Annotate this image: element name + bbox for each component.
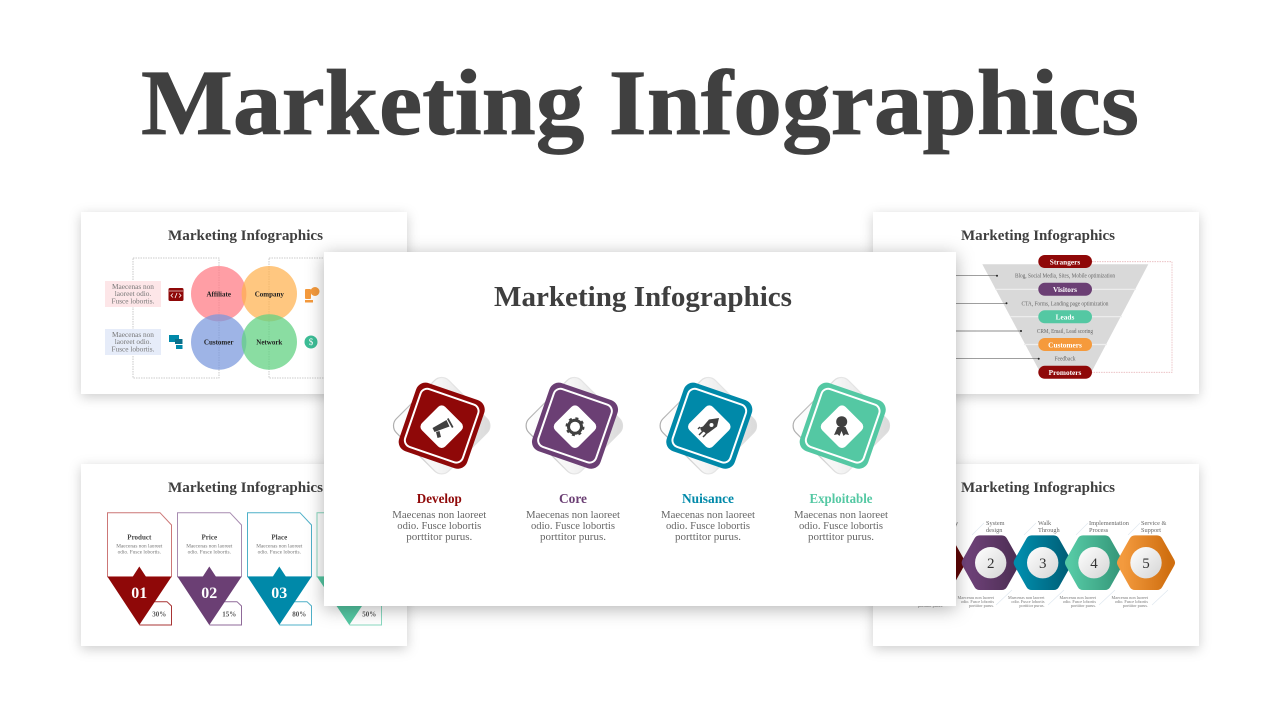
panel: pentagon pointer slide	[81, 464, 407, 646]
process descriptions: porttitor purus.	[1123, 603, 1148, 608]
step 01 product: Maecenas non laoreet	[116, 544, 163, 550]
body Core: Maecenas non laoreet	[526, 509, 620, 521]
body Exploitable: odio. Fusce lobortis	[799, 520, 883, 532]
funnel descriptions: CTA, Forms, Landing page optimization	[1022, 301, 1109, 307]
funnel descriptions: CRM, Email, Lead scoring	[1037, 329, 1093, 335]
venn circles: Affiliate	[206, 290, 231, 298]
pill: Customers: Customers	[1048, 340, 1082, 349]
pointer slide heading: Marketing Infographics	[168, 480, 323, 496]
hexagon 3	[1020, 541, 1066, 584]
pill: Strangers	[1038, 255, 1092, 268]
process labels: Process	[1089, 527, 1109, 534]
body Core: porttitor purus.	[540, 531, 606, 543]
venn circles: Customer	[204, 338, 233, 346]
funnel descriptions: Blog, Social Media, Sites, Mobile optimization	[1015, 274, 1115, 280]
text box: pink: laoreet odio.	[115, 289, 151, 298]
hexagon 5	[1123, 541, 1169, 584]
text box: blue: laoreet odio.	[115, 337, 151, 346]
label Develop: Develop	[417, 492, 462, 507]
hexagon 1	[913, 541, 959, 584]
icon tile: rocket	[656, 373, 761, 478]
funnel shape	[982, 264, 1148, 372]
icon tile: medal	[789, 373, 894, 478]
panel: hexagon process slide	[873, 464, 1199, 646]
process labels: Through	[1038, 527, 1061, 534]
process descriptions: odio. Fusce lobortis	[1011, 599, 1045, 604]
process labels: Service &	[1141, 520, 1166, 527]
process descriptions: porttitor purus.	[969, 603, 994, 608]
pill: Visitors	[1038, 283, 1092, 296]
pill: Strangers: Strangers	[1050, 257, 1080, 266]
body Nuisance: Maecenas non laoreet	[661, 509, 755, 521]
process labels: System	[986, 520, 1005, 527]
step 01 product: odio. Fusce lobortis.	[118, 550, 161, 556]
process labels	[955, 520, 1166, 534]
funnel slide heading: Marketing Infographics	[961, 228, 1115, 244]
item: Develop	[389, 373, 494, 543]
label Nuisance: Nuisance	[682, 492, 734, 507]
process descriptions: odio. Fusce lobortis	[1063, 599, 1096, 604]
icon: web layout	[169, 335, 182, 349]
process descriptions	[918, 595, 1149, 608]
text box: blue	[105, 329, 161, 355]
pill: Visitors: Visitors	[1053, 285, 1077, 294]
leader lines	[955, 275, 1040, 360]
hexagon 4	[1071, 541, 1117, 584]
process labels: Implementation	[1089, 520, 1130, 527]
venn circles	[191, 266, 297, 370]
step 04 partly hidden	[317, 513, 382, 625]
title: Marketing Infographics	[141, 52, 1139, 155]
body Exploitable	[794, 509, 888, 543]
step 01 product	[108, 513, 172, 625]
process descriptions: Maecenas non laoreet	[1059, 595, 1097, 600]
icon: phone and coin	[305, 287, 320, 302]
venn circles: Network	[256, 338, 282, 346]
process labels: Support	[1141, 527, 1161, 534]
hexagon 2: 2	[987, 556, 994, 572]
process descriptions: Maecenas non laoreet	[1111, 595, 1149, 600]
body Nuisance	[661, 509, 755, 543]
diagonal connectors	[972, 523, 1168, 605]
label Exploitable: Exploitable	[810, 492, 872, 507]
step 04 partly hidden: 50%	[362, 611, 376, 619]
pill: Customers	[1038, 338, 1092, 351]
venn slide heading: Marketing Infographics	[168, 228, 323, 244]
hexagon 4: 4	[1090, 556, 1098, 572]
text box: blue: Fusce lobortis.	[112, 344, 155, 354]
icon: code window	[168, 288, 184, 301]
step 01 product: Product	[127, 534, 152, 542]
icon tile: gear	[522, 373, 627, 478]
step 03 place: 03	[271, 585, 287, 602]
process descriptions: odio. Fusce lobortis	[961, 599, 994, 604]
step 02 price: Price	[202, 534, 217, 542]
pill: Leads: Leads	[1056, 312, 1074, 322]
pill: Promoters: Promoters	[1049, 368, 1082, 377]
step 01 product: 01	[131, 585, 147, 602]
process descriptions: Maecenas non laoreet	[1008, 595, 1045, 600]
step 03 place	[248, 513, 312, 625]
item: Exploitable	[789, 373, 894, 543]
icon: dollar coin: $	[309, 337, 314, 347]
body Develop: porttitor purus.	[406, 531, 473, 543]
process descriptions: porttitor purus.	[1019, 603, 1044, 608]
step 02 price	[178, 513, 242, 625]
step 02 price: 02	[201, 585, 217, 602]
body Develop: odio. Fusce lobortis	[397, 520, 481, 532]
step 03 place: Maecenas non laoreet	[256, 544, 303, 550]
icon tile: megaphone	[389, 373, 494, 478]
hexagon 3: 3	[1039, 556, 1046, 572]
step 03 place: odio. Fusce lobortis.	[258, 550, 301, 556]
item: Core	[522, 373, 627, 543]
step 03 place: Place	[271, 534, 287, 542]
venn circles: Company	[255, 290, 284, 298]
process descriptions: porttitor purus.	[918, 603, 943, 608]
pill: Promoters	[1038, 366, 1092, 379]
funnel descriptions	[1015, 274, 1115, 363]
text box: blue: Maecenas non	[112, 330, 154, 339]
process slide heading: Marketing Infographics	[961, 480, 1115, 496]
process descriptions: Maecenas non laoreet	[957, 595, 995, 600]
text box: pink: Fusce lobortis.	[112, 296, 155, 306]
body Core: odio. Fusce lobortis	[531, 520, 615, 532]
process descriptions: porttitor purus.	[1071, 603, 1096, 608]
process labels: design	[986, 527, 1003, 534]
panel: venn diagram slide	[81, 212, 407, 394]
label Core: Core	[559, 492, 587, 507]
body Develop	[392, 509, 486, 543]
loop connector	[1092, 262, 1172, 372]
step 01 product: 30%	[152, 611, 166, 619]
funnel descriptions: Feedback	[1054, 357, 1076, 363]
hexagon 2	[968, 541, 1014, 584]
step 02 price: Maecenas non laoreet	[186, 544, 233, 550]
body Exploitable: Maecenas non laoreet	[794, 509, 888, 521]
body Core	[526, 509, 620, 543]
process labels: Walk	[1038, 520, 1052, 527]
step 02 price: 15%	[222, 611, 236, 619]
item: Nuisance	[656, 373, 761, 543]
body Develop: Maecenas non laoreet	[392, 509, 486, 521]
process labels: y	[955, 520, 959, 527]
icon: dollar coin	[304, 336, 318, 348]
body Nuisance: odio. Fusce lobortis	[666, 520, 750, 532]
step 03 place: 80%	[292, 611, 306, 619]
process descriptions: odio. Fusce lobortis	[1115, 599, 1148, 604]
body Exploitable: porttitor purus.	[808, 531, 874, 543]
central slide heading: Marketing Infographics	[494, 282, 792, 313]
hexagon 5: 5	[1142, 556, 1150, 572]
pill: Leads	[1038, 310, 1092, 323]
text box: pink: Maecenas non	[112, 282, 154, 291]
panel: central slide	[324, 252, 956, 606]
panel: funnel slide	[873, 212, 1199, 394]
text box: pink	[105, 281, 161, 307]
body Nuisance: porttitor purus.	[675, 531, 741, 543]
step 02 price: odio. Fusce lobortis.	[188, 550, 231, 556]
